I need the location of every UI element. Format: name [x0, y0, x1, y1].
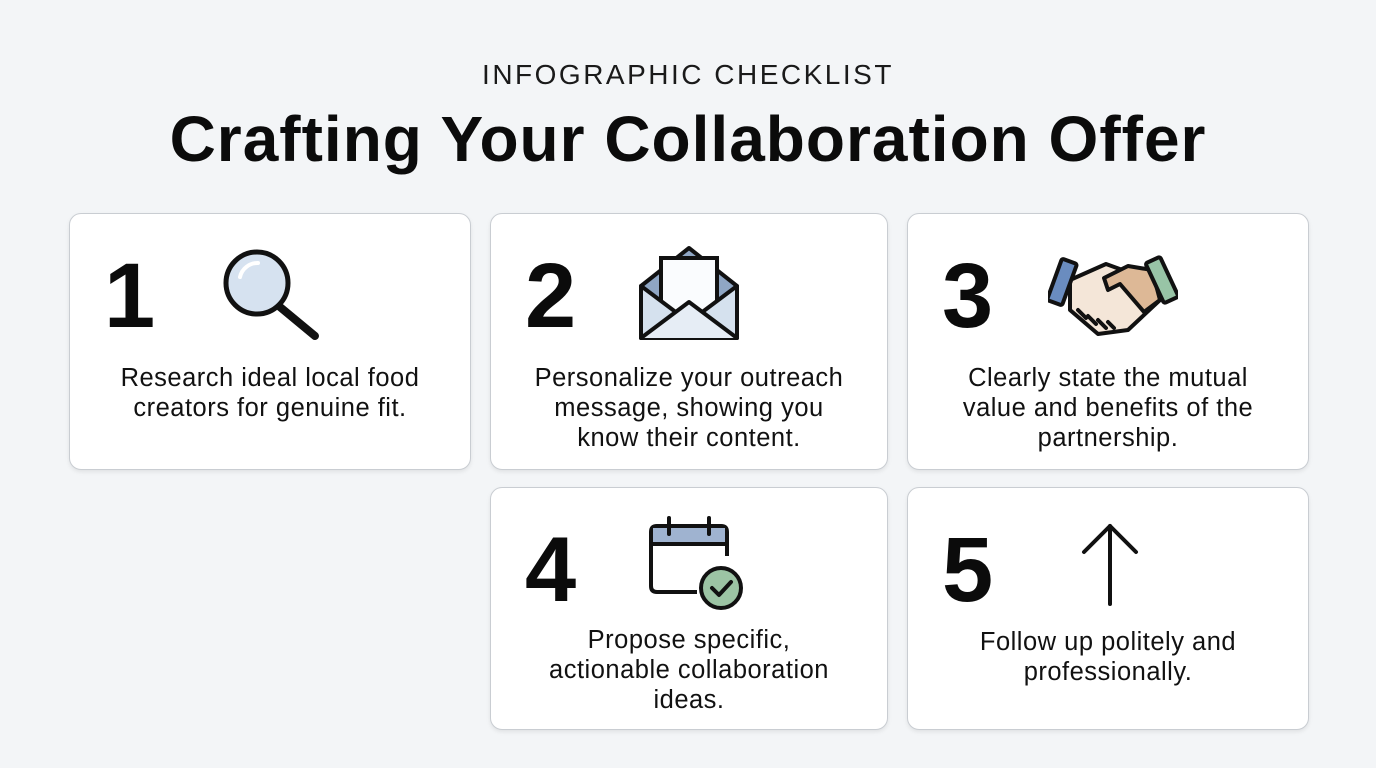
card 3: mutual value [907, 213, 1309, 470]
text: message, showing you [554, 394, 824, 422]
icon: magnifier [224, 250, 319, 340]
card 5: follow up [907, 487, 1309, 730]
text: Personalize your outreach [535, 364, 843, 392]
icon: calendar check [649, 516, 743, 610]
card 1: research [69, 213, 471, 470]
icon: handshake [1048, 255, 1178, 336]
text: actionable collaboration [549, 656, 829, 684]
text: creators for genuine fit. [133, 394, 407, 422]
number 2: 2 [525, 245, 576, 347]
number 4: 4 [525, 519, 576, 621]
text: professionally. [1024, 658, 1192, 686]
text [980, 628, 1236, 686]
number 3: 3 [942, 245, 993, 347]
card 4: propose ideas [490, 487, 888, 730]
subtitle: INFOGRAPHIC CHECKLIST [482, 59, 894, 90]
text [963, 364, 1253, 452]
text: partnership. [1038, 424, 1178, 452]
text: Research ideal local food [121, 364, 419, 392]
icon: up arrow [1082, 524, 1138, 606]
text [535, 364, 843, 452]
text: Follow up politely and [980, 628, 1236, 656]
text: value and benefits of the [963, 394, 1253, 422]
number 5: 5 [942, 519, 993, 621]
text [121, 364, 419, 422]
text: Propose specific, [588, 626, 790, 654]
number 1: 1 [104, 245, 155, 347]
text: ideas. [653, 686, 725, 714]
title: Crafting Your Collaboration Offer [170, 103, 1206, 175]
card 2: personalize [490, 213, 888, 470]
icon: envelope [639, 246, 739, 340]
text: Clearly state the mutual [968, 364, 1248, 392]
text: know their content. [577, 424, 801, 452]
text [549, 626, 829, 714]
